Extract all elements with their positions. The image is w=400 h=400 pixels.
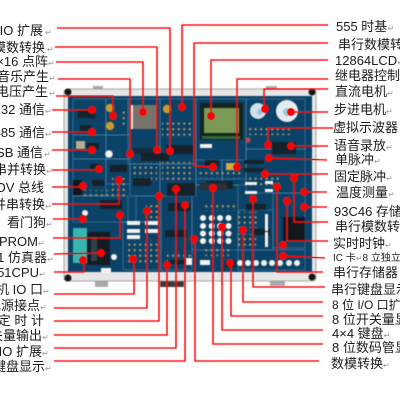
emulator socket	[87, 232, 110, 265]
left return marks: ↵	[46, 167, 53, 176]
switch row	[237, 260, 300, 266]
label: DC motor: 直流电机↵	[335, 84, 394, 99]
white parts	[82, 144, 273, 273]
LOV bus connector	[73, 180, 82, 195]
left return marks: ↵	[43, 287, 50, 296]
left labels	[0, 23, 56, 374]
callout lines	[52, 25, 333, 361]
DC motor knob	[250, 103, 266, 119]
solder pad grids	[84, 108, 291, 265]
segment display	[200, 183, 227, 190]
case corners	[64, 88, 316, 282]
left return marks: ↵	[40, 303, 47, 312]
red marker dots	[79, 103, 308, 269]
left return marks: ↵	[46, 220, 53, 229]
label: virtual oscilloscope: 虚拟示波器	[333, 120, 398, 135]
label: IC card and independent: IC 卡↵8 立独立	[333, 251, 400, 264]
LCD lower strip	[202, 136, 240, 139]
LCD module	[200, 103, 243, 140]
ZIF socket	[73, 228, 87, 263]
left return marks: ↵	[42, 333, 49, 342]
left return marks: ↵	[39, 270, 46, 279]
case handles	[93, 86, 285, 287]
left return marks: ↵	[44, 150, 51, 159]
left return marks: ↵	[49, 74, 56, 83]
label: RTC: 实时时钟↵	[333, 236, 392, 251]
red terminal	[245, 137, 251, 143]
circuit board	[68, 96, 312, 272]
left return marks: ↵	[45, 130, 52, 139]
label: stepper motor: 步进电机↵	[334, 102, 393, 117]
left return marks: ↵	[42, 349, 49, 358]
right labels	[331, 19, 400, 371]
label: single pulse: 单脉冲↵	[335, 152, 381, 167]
gold crystals and buzzers	[106, 104, 236, 170]
line: right lower group	[195, 178, 328, 361]
line: left lower group	[52, 180, 185, 361]
left return marks: ↵	[47, 255, 54, 264]
label: watchdog: 看门狗	[7, 215, 46, 230]
label: relay: 继电器控制	[335, 68, 400, 83]
keypad white keys	[200, 215, 232, 244]
section outlines	[73, 99, 305, 270]
crystal oscillator	[76, 141, 85, 149]
label: DA conversion: 数模转换↵	[331, 356, 390, 371]
label: voice record: 语音录放↵	[334, 138, 393, 153]
knob centres	[257, 108, 291, 116]
chips	[78, 110, 296, 267]
left return marks: ↵	[38, 239, 45, 248]
line: right upper group	[182, 25, 333, 192]
case frame	[64, 89, 316, 281]
left return marks: ↵	[49, 89, 56, 98]
experiment board case	[64, 86, 316, 287]
stepper motor knob	[276, 100, 298, 122]
left return marks: ↵	[47, 45, 54, 54]
left return marks: ↵	[45, 364, 52, 373]
emulator socket pins	[91, 237, 97, 261]
LCD screen	[204, 108, 239, 133]
left return marks	[38, 28, 56, 373]
dot matrix module	[132, 105, 157, 129]
label: 4x4 keypad: 4×4 键盘↵	[332, 326, 390, 341]
label: serial memory: 串行存储器	[333, 265, 398, 280]
line: left upper group	[52, 28, 170, 187]
left return marks: ↵	[45, 28, 52, 37]
left return marks: ↵	[45, 202, 52, 211]
label: 93C46: 93C46 存储	[334, 204, 400, 219]
label: temperature: 温度测量↵	[336, 185, 395, 200]
left return marks: ↵	[48, 59, 55, 68]
relay	[283, 217, 305, 241]
label: 555 timer: 555 时基↵	[336, 19, 394, 34]
label: fixed pulse: 固定脉冲↵	[334, 169, 393, 184]
left return marks: ↵	[45, 107, 52, 116]
label: IO expansion: IO 扩展	[0, 23, 43, 38]
